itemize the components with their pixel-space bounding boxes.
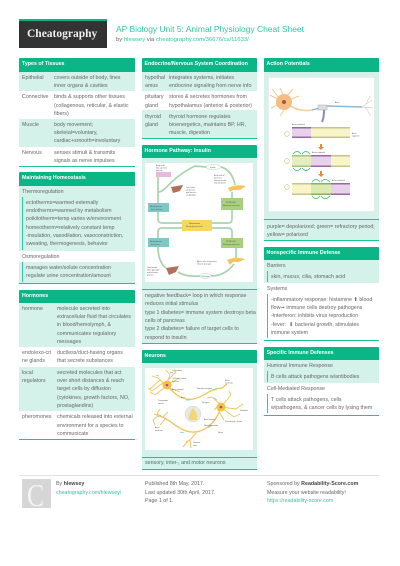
heading: Neurons [144,353,166,359]
heading [264,347,378,360]
cell-mediated label: Cell-Mediated Response [267,386,325,392]
cell-mediated text: T cells attack pathogens, cells w/pathogens, & cancer cells by lysing them [271,397,372,411]
panel: neurons [142,350,257,470]
term: connective: Connective [22,94,48,100]
heading: Types of Tissues [22,61,64,67]
chart: action potential propagation diagram: Axon [352,132,356,135]
chart: neuron diagram: Postsynaptic neuron [225,420,242,423]
term: nervous: Nervous [22,150,42,156]
footer: dates: Published 8th May, 2017. Last updated 30th April, 2017. Page 1 of 1. [145,481,215,504]
definition: pheromones: chemicals released into external environment for a species to communicate [57,414,133,437]
heading: Nonspecific Immune Defense [266,250,340,256]
systems text: -inflammatory response: histamine ⬆ blood flow➞ immune cells destroy pathogens -interferon: inhibits virus reproduction -fever: ⬇ bacterial growth, stimulates immune system [271,297,372,336]
definition: epithelial: covers outside of body, lines inner organs & cavities [54,75,120,89]
heading: Action Potentials [266,61,310,67]
heading [19,172,134,186]
caption text [142,458,256,469]
panel: maintaining homeostasis [19,172,135,284]
chart: insulin feedback loop diagram: Beta cells of [214,174,225,177]
chart: neuron diagram: Axon terminal [172,388,184,391]
chart: insulin feedback loop diagram: Alpha cells of pancreas [197,260,217,263]
definition: thyroid gland: thyroid hormone regulates bioenergetics, maintains BP, HR, muscle, digestion [169,114,246,136]
chart: action potential propagation diagram: Axon [335,101,339,104]
chart: insulin feedback loop diagram: release insulin [214,179,226,182]
chart: neuron diagram: Axon [155,426,159,429]
panel: action potentials [264,58,379,241]
heading [19,58,134,72]
heading [19,290,134,304]
heading [264,58,378,72]
chart: insulin feedback loop diagram: glucose [147,274,154,276]
chart: neuron diagram: Terminal [193,441,201,444]
panel: hormones [19,290,135,440]
chart: neuron diagram [145,368,253,450]
chart: action potential propagation diagram: Action potential [292,123,306,126]
image panel background [264,72,378,219]
footer divider [19,474,379,477]
osmoregulation block: manages water/solute concentration regulate urine concentration/amount [26,265,111,279]
chart: neuron diagram: Cell body (soma) [172,378,187,380]
definition: pituitary gland: stores & secretes hormones from hypothalamus (anterior & posterior) [169,94,252,109]
thermoregulation block: Thermoregulation [22,189,64,195]
term: pheromones: pheromones [22,414,51,420]
humoral block: B cells attack pathogens w/antibodies [271,374,359,380]
chart: insulin feedback loop diagram: take up more [156,166,167,170]
chart: action potential propagation diagram: segment [352,134,360,138]
chart: neuron diagram: neuron [158,402,164,405]
chart: insulin feedback loop diagram: Blood glucose level [223,205,240,207]
heading: Hormone Pathway: Insulin [144,148,211,154]
definition: local regulators: secreted molecules that act over short distances & reach target cells by diffusion (cytokines, growth factors, NO, prostaglandins) [57,370,129,409]
systems bar [267,294,268,338]
panel: nonspecific immune defense [264,247,379,341]
chart: insulin feedback loop diagram: Blood glucose [150,241,162,243]
barriers block [264,260,378,283]
caption text [264,220,378,240]
term: pituitary gland: pituitary gland [145,94,164,109]
chart: insulin feedback loop diagram: pancreas [214,176,222,180]
heading: Hormones [22,293,48,299]
chart: insulin feedback loop diagram: Blood glucose level [186,226,203,228]
term: local regulators: local regulators [22,370,46,384]
chart: insulin feedback loop diagram: Glucagon [202,276,210,278]
chart: action potential propagation diagram: Action potential [332,179,346,182]
caption text: purple= depolarized; green= refractory period; yellow= polarized [267,224,375,238]
chart: neuron diagram: Axon [181,396,185,399]
panel: hormone pathway insulin [142,145,257,344]
chart: insulin feedback loop diagram: Insulin [210,167,215,169]
chart: insulin feedback loop diagram: STIMULUS: [226,241,237,243]
footer: author: By hlewsey cheatography.com/hlewsey/ [56,481,121,496]
row backgrounds [19,72,135,147]
definition: endo/exocrine glands: ductless/duct-having organs that secrete substances [57,350,123,364]
icon: author avatar [22,479,51,508]
chart: neuron diagram: Dendrites [174,369,182,372]
chart: insulin feedback loop diagram: and releases [147,271,158,274]
chart: neuron diagram: Axon terminal [204,418,216,421]
thermoregulation block [19,186,134,251]
osmoregulation label: Osmoregulation [22,254,59,260]
logo: Cheatography [27,28,97,40]
term: thyroid gland: thyroid gland [145,114,161,128]
definition: connective: binds & supports other tissues (collagenous, reticular, & elastic fibers) [54,94,128,117]
cell-mediated bar [267,394,268,413]
humoral block: Humoral Immune Response [267,363,333,369]
panel: endocrine/nervous system coordination [142,58,257,139]
row backgrounds [19,303,135,411]
caption text: sensory, inter-, and motor neurons [145,460,226,466]
chart: insulin feedback loop diagram: Blood glucose level [223,244,240,246]
chart: insulin feedback loop diagram: into the blood [214,182,225,184]
chart: insulin feedback loop diagram: Blood glucose [150,206,162,208]
panel: specific immune defenses [264,347,379,416]
systems label: Systems [267,286,287,292]
heading [142,350,256,364]
term: muscle: Muscle [22,122,39,128]
chart: insulin feedback loop diagram: as glycogen [186,194,196,196]
definition: muscle: body movement; skeletal=voluntary, cardiac+smooth=involuntary [54,122,120,144]
chart: neuron diagram: Axon [225,379,229,382]
chart: insulin feedback loop diagram: and stores it [186,191,197,194]
term: endo/exocrine glands: endo/exo-cri ne glands [22,350,51,364]
chart: neuron diagram: Dendrites [240,409,248,412]
caption text: negative feedback= loop in which response reduces initial stimulus type 1 diabetes= immune system destroys beta cells of pancreas type 2 diabetes= failure of target cells to respond to insulin [145,293,256,341]
chart: insulin feedback loop diagram: level declines [151,209,162,211]
definition: hormone: molecule secreted into extracellular fluid that circulates in blood/hemolymph, & communicates regulatory messages [57,306,131,345]
logo [19,19,107,48]
osmoregulation block [19,262,134,283]
chart: neuron diagram: cone [193,445,197,447]
chart: action potential propagation diagram [268,77,375,212]
chart: insulin feedback loop diagram: STIMULUS: [226,202,237,204]
chart: insulin feedback loop diagram: Liver breaks [147,266,157,269]
heading [264,247,378,260]
barriers block: skin, mucus, cilia, stomach acid [271,274,345,280]
heading [142,145,256,158]
chart: insulin feedback loop diagram: Body cells [156,165,165,167]
heading [142,58,256,72]
definition: nervous: senses stimuli & transmits signals as nerve impulses [54,150,115,164]
heading: Maintaining Homeostasis [22,175,86,181]
title: AP Biology Unit 5: Animal Physiology Cheat Sheet [116,24,304,34]
term: hormone: hormone [22,306,43,312]
chart: neuron diagram: Presynaptic [158,399,168,402]
chart: insulin feedback loop diagram [145,163,253,282]
humoral block [264,360,378,383]
chart: insulin feedback loop diagram: glucose [156,170,163,172]
panel: types of tissues [19,58,135,167]
row backgrounds [142,72,257,138]
image panel background [142,158,256,289]
chart: action potential propagation diagram: Action potential [312,151,326,154]
chart: neuron diagram: Nerve [218,431,223,434]
definition: hypothalamus: integrates systems, initiates endocrine signaling from nerve info [169,75,251,89]
heading: Specific Immune Defenses [266,350,334,356]
chart: neuron diagram: terminals [155,429,163,432]
chart: insulin feedback loop diagram: up glucose [186,190,195,192]
image panel background [142,363,256,457]
byline: by hlewsey via cheatography.com/36676/cs/11633/ [116,37,249,43]
chart: neuron diagram: Neurotransmitter [204,424,218,427]
heading: Endocrine/Nervous System Coordination [144,61,248,67]
chart: neuron diagram: terminals [225,382,233,384]
chart: insulin feedback loop diagram: Homeostasis: [189,222,201,225]
chart: insulin feedback loop diagram: Liver takes [186,186,195,189]
chart: neuron diagram: Nucleus [172,381,179,383]
thermoregulation block: ectotherms=warmed externally endotherms=warmed by metabolism poikilotherm=temp varies w/environment homeotherm=relatively constant temp -insulation, vasodilation, vasoconstriction, sweating, thermogenesis, behavior [26,200,123,247]
barriers block: Barriers [267,263,286,269]
chart: insulin feedback loop diagram: release glucagon [197,262,211,266]
chart: neuron diagram: Direction of signal [197,387,213,390]
chart: insulin feedback loop diagram: level rises [151,243,159,246]
term: epithelial: Epithelial [22,75,44,81]
footer: sponsor: Sponsored by Readability-Score.com Measure your website readability! https://readability-score.com [267,481,358,504]
chart: neuron diagram: Synapse [202,402,209,404]
term: hypothalamus: hypothal amus [145,75,165,89]
chart: insulin feedback loop diagram: down glycogen [147,270,160,272]
